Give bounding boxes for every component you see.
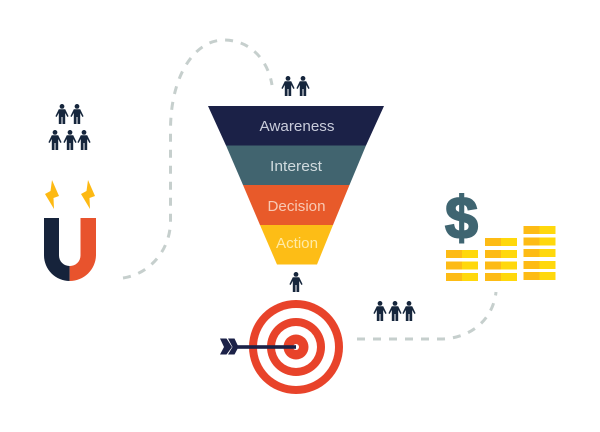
coin stacks xyxy=(446,226,556,281)
people group: two above three, left xyxy=(48,104,91,150)
target rings xyxy=(249,300,343,394)
icon: magnet xyxy=(44,218,96,281)
funnel level: Awareness xyxy=(208,106,384,146)
funnel xyxy=(208,106,384,264)
coin stack 2 xyxy=(485,238,517,281)
target with arrow xyxy=(220,300,343,394)
funnel level: Action: Action xyxy=(276,236,318,252)
funnel level: Interest: Interest xyxy=(270,159,322,175)
funnel level: Decision: Decision xyxy=(268,199,326,215)
funnel level: Interest xyxy=(226,146,366,185)
funnel level: Decision xyxy=(243,185,350,225)
funnel level: Awareness: Awareness xyxy=(260,119,334,135)
arrow xyxy=(220,338,296,354)
person below funnel xyxy=(289,272,303,292)
people pair above funnel xyxy=(281,76,310,96)
people group: three, right of target xyxy=(373,301,416,321)
coin stack 1 xyxy=(446,250,478,281)
icon: lightning bolts xyxy=(45,180,95,209)
coin stack 3 xyxy=(524,226,556,280)
icon: dollar sign: $ xyxy=(445,185,478,251)
dashed path: magnet to funnel xyxy=(123,40,272,278)
funnel level: Action xyxy=(260,225,333,264)
dashed path: target to coins xyxy=(357,292,496,339)
